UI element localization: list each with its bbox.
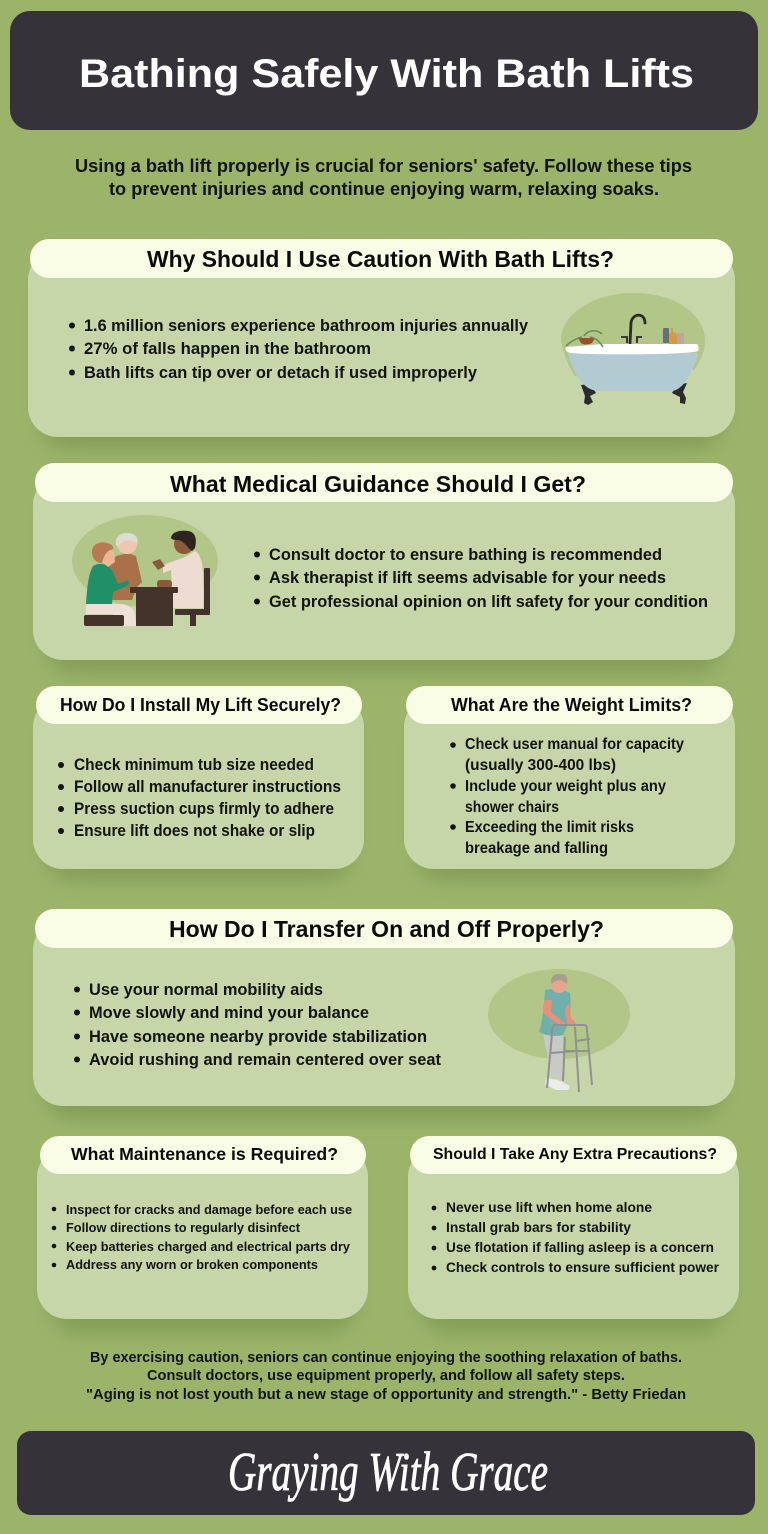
bullet list: Use your normal mobility aids [89,981,323,999]
heading: What Are the Weight Limits? [451,695,692,715]
bullet list: Ensure lift does not shake or slip [74,822,315,840]
bullet list: Inspect for cracks and damage before each use [66,1202,352,1217]
bullet list: Ask therapist if lift seems advisable for your needs [269,569,666,587]
bullet list: Bath lifts can tip over or detach if used improperly [84,364,478,382]
closing text [86,1349,686,1403]
bullet list: Include your weight plus any [465,778,666,795]
bullet list: Press suction cups firmly to adhere [74,800,334,818]
closing text: Consult doctors, use equipment properly, and follow all safety steps. [147,1367,625,1384]
bullet list: Get professional opinion on lift safety for your condition [269,593,708,611]
panel: weight limits [404,686,735,882]
bullet list: Follow all manufacturer instructions [74,778,341,796]
bullet list: 1.6 million seniors experience bathroom injuries annually [84,317,529,335]
icon: doctor consultation [72,515,218,626]
bullet list: Move slowly and mind your balance [89,1004,369,1022]
bullet list: (usually 300-400 lbs) [465,757,616,774]
heading: How Do I Transfer On and Off Properly? [169,916,604,942]
closing text: By exercising caution, seniors can continue enjoying the soothing relaxation of baths. [90,1349,682,1366]
bullet list: Check user manual for capacity [465,736,684,753]
bullet list: Install grab bars for stability [446,1219,631,1235]
bullet list: 27% of falls happen in the bathroom [84,340,371,358]
bullet list [432,1199,720,1275]
panel: maintenance [37,1136,368,1334]
bullet list [58,756,341,840]
bullet list [69,317,529,382]
bullet list [254,546,708,611]
heading: Why Should I Use Caution With Bath Lifts? [147,246,614,272]
bullet list: Have someone nearby provide stabilization [89,1028,427,1046]
heading: What Medical Guidance Should I Get? [170,471,586,497]
intro text: to prevent injuries and continue enjoying warm, relaxing soaks. [109,178,659,199]
bullet list: Never use lift when home alone [446,1199,652,1215]
heading: Should I Take Any Extra Precautions? [433,1146,717,1163]
closing text: "Aging is not lost youth but a new stage of opportunity and strength." - Betty Friedan [86,1386,686,1403]
bullet list: Check minimum tub size needed [74,756,314,774]
bullet list: Keep batteries charged and electrical parts dry [66,1239,351,1254]
icon: bathtub [561,293,705,405]
panel: medical guidance [33,463,735,674]
bullet list [74,981,441,1069]
bullet list [450,736,684,857]
icon: person with walker [488,969,630,1092]
bullet list: Exceeding the limit risks [465,819,634,836]
title banner [10,11,758,130]
title: Bathing Safely With Bath Lifts [79,52,694,96]
logo wordmark: Graying With Grace [228,1441,548,1502]
bullet list: Address any worn or broken components [66,1257,318,1272]
bullet list: breakage and falling [465,840,608,857]
footer banner [17,1431,755,1515]
panel: extra precautions [408,1136,739,1334]
bullet list [52,1202,352,1272]
panel: install securely [33,686,364,882]
bullet list: Avoid rushing and remain centered over seat [89,1051,441,1069]
bullet list: Consult doctor to ensure bathing is recommended [269,546,662,564]
bullet list: shower chairs [465,799,559,816]
intro text [75,155,692,199]
panel: why use caution [28,239,735,450]
panel: transfer on and off [33,909,735,1120]
bullet list: Check controls to ensure sufficient power [446,1259,720,1275]
bullet list: Use flotation if falling asleep is a concern [446,1239,714,1255]
bullet list: Follow directions to regularly disinfect [66,1220,301,1235]
heading: What Maintenance is Required? [71,1144,338,1164]
intro text: Using a bath lift properly is crucial for seniors' safety. Follow these tips [75,155,692,176]
heading: How Do I Install My Lift Securely? [60,695,341,715]
